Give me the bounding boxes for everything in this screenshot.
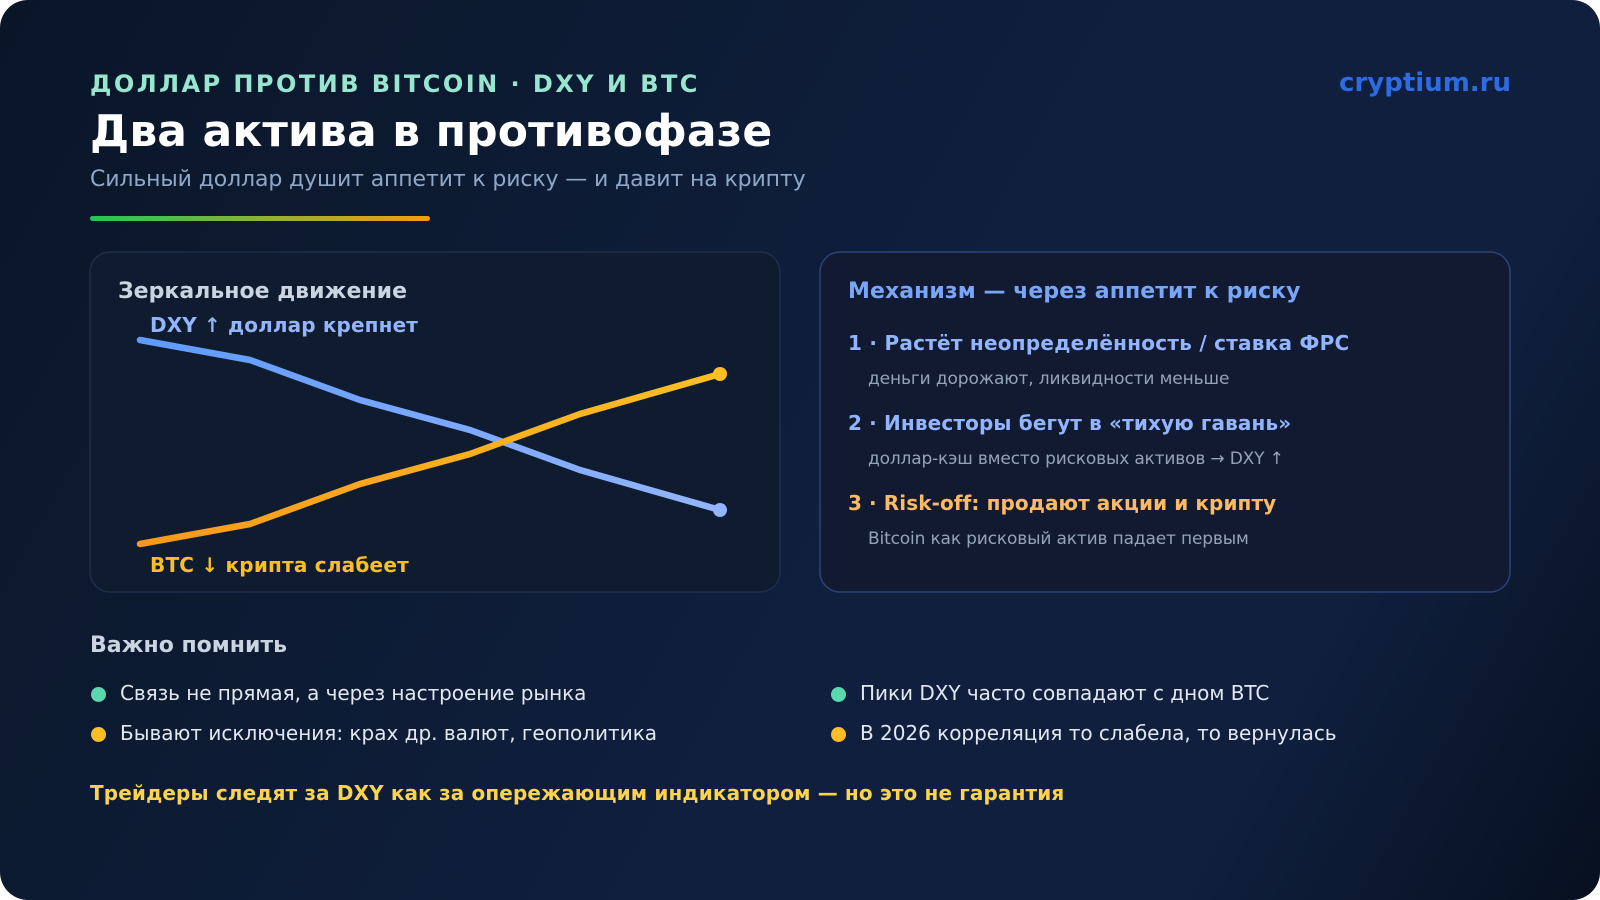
bullet text 2: Бывают исключения: крах др. валют, геополитика bbox=[120, 721, 657, 745]
bullet text 1: Связь не прямая, а через настроение рынка bbox=[120, 681, 586, 705]
brand label: cryptium.ru bbox=[1339, 68, 1511, 98]
bullet text 4: В 2026 корреляция то слабела, то вернулась bbox=[860, 721, 1337, 745]
step 2 detail: доллар-кэш вместо рисковых активов → DXY ↑ bbox=[868, 449, 1284, 469]
DXY label: DXY ↑ доллар крепнет bbox=[150, 313, 418, 337]
panel heading: mechanism: Механизм — через аппетит к риску bbox=[848, 279, 1301, 304]
BTC label: BTC ↓ крипта слабеет bbox=[150, 553, 409, 577]
step 2 title: 2 · Инвесторы бегут в «тихую гавань» bbox=[848, 411, 1291, 435]
bullet text 3: Пики DXY часто совпадают с дном BTC bbox=[860, 681, 1269, 705]
title: Два актива в противофазе bbox=[90, 106, 772, 157]
takeaway note: Трейдеры следят за DXY как за опережающим индикатором — но это не гарантия bbox=[90, 781, 1064, 805]
subtitle: Сильный доллар душит аппетит к риску — и давит на крипту bbox=[90, 167, 805, 192]
eyebrow heading: ДОЛЛАР ПРОТИВ BITCOIN · DXY И BTC bbox=[90, 70, 700, 98]
step 1 detail: деньги дорожают, ликвидности меньше bbox=[868, 369, 1229, 389]
panel heading: mirror movement: Зеркальное движение bbox=[118, 279, 407, 304]
step 1 title: 1 · Растёт неопределённость / ставка ФРС bbox=[848, 331, 1349, 355]
section heading: Важно помнить bbox=[90, 633, 287, 658]
step 3 detail: Bitcoin как рисковый актив падает первым bbox=[868, 529, 1249, 549]
step 3 title: 3 · Risk-off: продают акции и крипту bbox=[848, 491, 1276, 515]
